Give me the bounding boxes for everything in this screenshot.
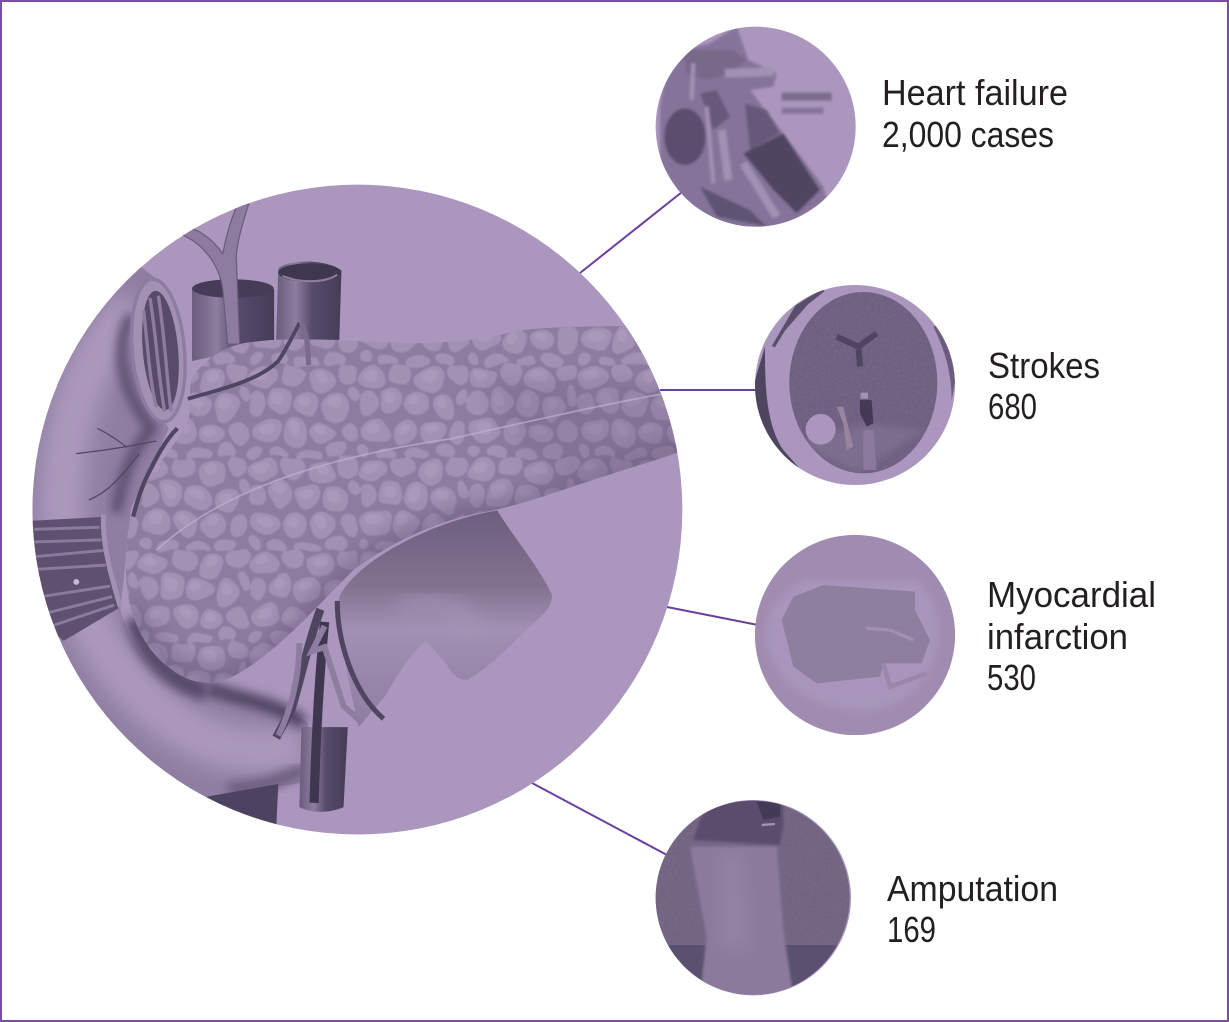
lower vessel behind duodenum: [207, 784, 278, 828]
label: amputation: 169: [887, 909, 936, 950]
duodenum opening: [130, 278, 187, 424]
branching vessels: [276, 601, 384, 812]
hepatic arteries: [76, 323, 309, 517]
thumbnail: myocardial infarction: [755, 535, 955, 735]
pancreas: [126, 326, 678, 682]
duodenum: [32, 267, 311, 798]
label: strokes: 680: [988, 386, 1037, 427]
label: strokes: Strokes: [988, 345, 1100, 386]
duodenal folds: [30, 515, 120, 641]
main circle: pancreas illustration: [30, 180, 703, 853]
label: amputation: [887, 868, 1058, 950]
connector: amputation: [532, 783, 667, 855]
thumbnail: amputation: [653, 797, 853, 997]
thumbnail: brain scan: [750, 285, 958, 485]
top cylinders: [192, 261, 341, 361]
label: heart failure: [882, 72, 1068, 155]
label: myocardial infarction: [987, 574, 1156, 698]
connector: heart failure: [580, 192, 682, 273]
thumbnail: heart: [656, 27, 856, 237]
connector: strokes: [660, 389, 757, 391]
label: myocardial infarction: 530: [987, 657, 1036, 698]
label: strokes: [988, 345, 1100, 427]
connector: myocardial infarction: [667, 607, 758, 625]
label: heart failure: 2,000 cases: [882, 114, 1054, 155]
label: myocardial infarction: infarction: [987, 616, 1128, 657]
branching artery: [182, 203, 249, 344]
label: myocardial infarction: Myocardial: [987, 574, 1156, 615]
jejunum: [339, 510, 552, 727]
label: amputation: Amputation: [887, 868, 1058, 909]
label: heart failure: Heart failure: [882, 72, 1068, 113]
